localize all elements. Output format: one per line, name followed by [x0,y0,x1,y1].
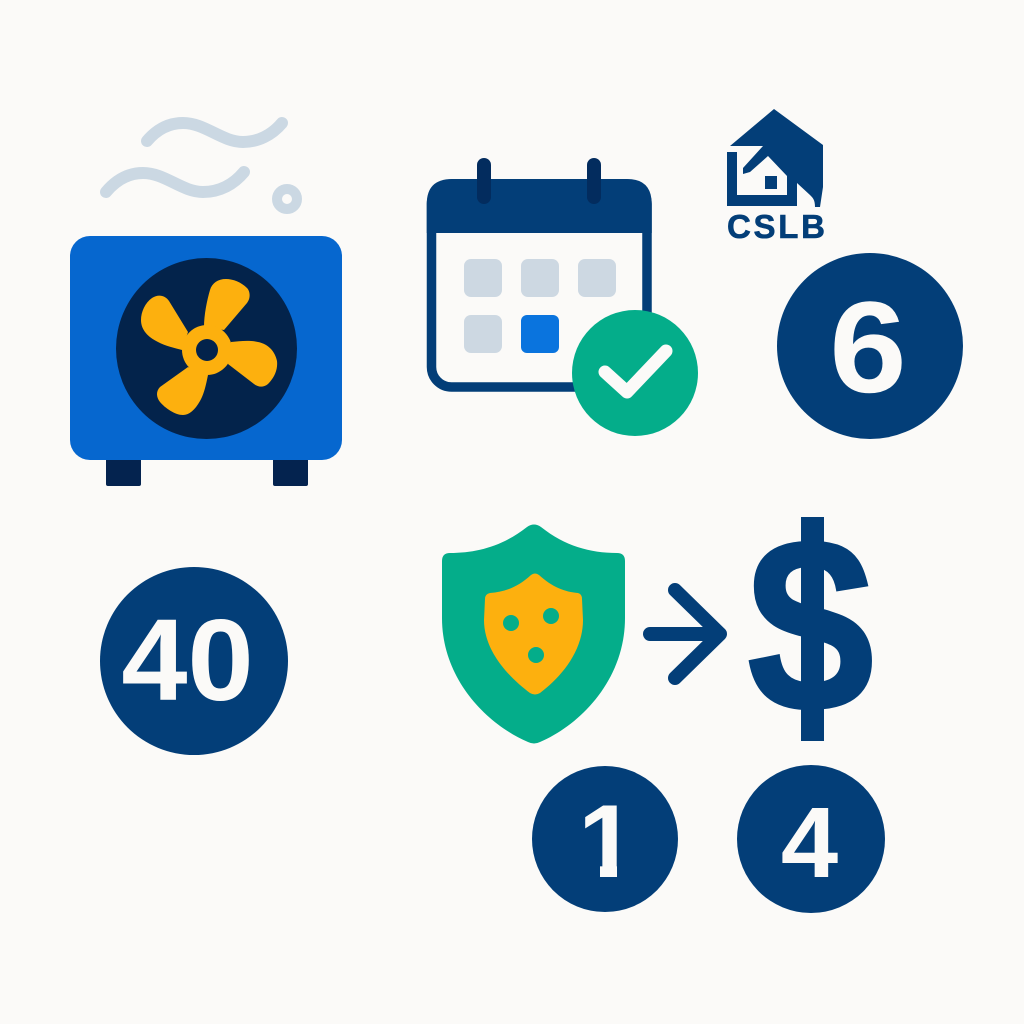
inner shield [484,574,583,694]
logo text: CSLB [727,208,825,245]
fan blades [141,279,277,415]
number badge: 1 [532,766,678,912]
logo house mark [727,109,823,207]
highlighted date [521,315,559,353]
logo: CSLB [727,109,825,245]
fan housing [116,258,297,439]
icon: calendar with check [427,158,698,436]
shield dots [503,608,559,663]
number badge: 6 [777,253,963,439]
number badge: 4: 4 [781,786,838,899]
number badge: 40 [100,567,288,755]
number badge: 4 [737,765,885,913]
number badge: 1: 1 [578,784,636,900]
outer shield [442,524,625,744]
dollar sign: $ [747,486,874,764]
unit feet [106,455,308,486]
calendar frame [432,184,647,387]
calendar date cells [464,259,616,353]
logo window [765,176,777,189]
calendar header [427,179,652,233]
number badge: 6: 6 [829,274,907,420]
calendar rings [477,158,601,204]
fan hub [196,339,218,361]
number badge: 40: 40 [121,595,254,725]
icon: shield [442,524,625,744]
icon: heat waves [106,123,297,209]
check badge [572,310,698,436]
arrow [650,590,720,678]
icon: heat pump unit [70,123,342,486]
unit body [70,236,342,460]
